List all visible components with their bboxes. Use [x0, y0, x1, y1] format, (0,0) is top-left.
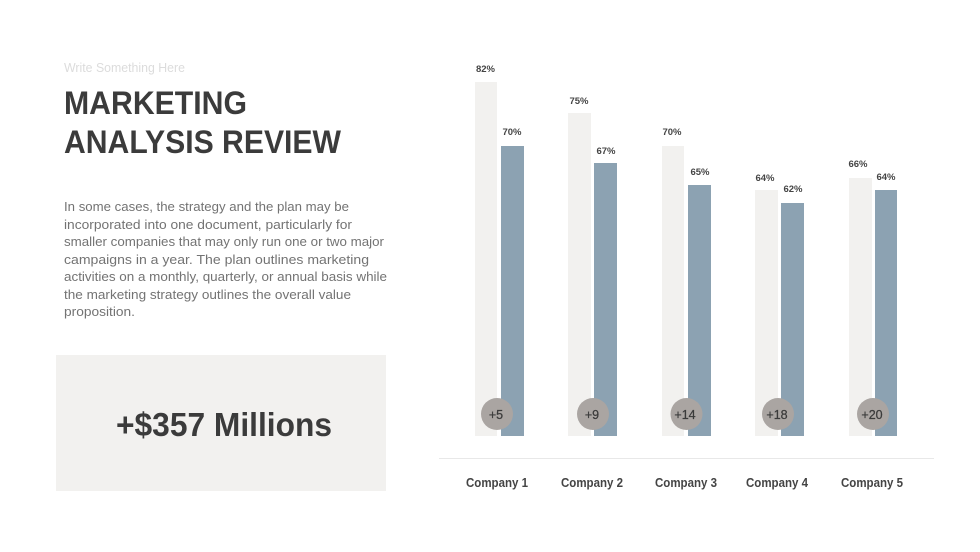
company labels: Company 3	[655, 476, 717, 490]
company 4 bars	[755, 173, 804, 436]
company 1 bars	[475, 64, 524, 436]
company 4 bars: 62%	[783, 184, 803, 195]
company 4 bars: 64%	[755, 173, 775, 184]
bar chart	[439, 64, 934, 490]
axis line	[439, 458, 934, 459]
company 2 bars: 75%	[569, 96, 589, 107]
body paragraph	[64, 199, 387, 319]
difference badges: +18	[766, 408, 788, 422]
callout value: +$357 Millions	[116, 406, 332, 443]
difference badges	[481, 398, 889, 430]
difference badges: +14	[674, 408, 696, 422]
body paragraph: incorporated into one document, particularly for	[64, 217, 353, 232]
company labels: Company 2	[561, 476, 623, 490]
company labels	[466, 476, 903, 490]
company labels: Company 4	[746, 476, 808, 490]
title: ANALYSIS REVIEW	[64, 124, 342, 160]
body paragraph: activities on a monthly, quarterly, or annual basis while	[64, 269, 387, 284]
body paragraph: proposition.	[64, 304, 135, 319]
company 3 bars	[662, 127, 711, 436]
company labels: Company 5	[841, 476, 903, 490]
title	[64, 85, 342, 160]
company labels: Company 1	[466, 476, 528, 490]
company 3 bars: 70%	[662, 127, 682, 138]
company 5 bars: 64%	[876, 172, 896, 183]
company 1 bars: 82%	[476, 64, 496, 75]
body paragraph: the marketing strategy outlines the overall value	[64, 287, 351, 302]
callout panel	[56, 355, 386, 491]
title: MARKETING	[64, 85, 247, 121]
body paragraph: campaigns in a year. The plan outlines marketing	[64, 252, 369, 267]
company 5 bars	[848, 159, 897, 436]
body paragraph: smaller companies that may only run one or two major	[64, 234, 385, 249]
company 3 bars: 65%	[690, 167, 710, 178]
eyebrow text: Write Something Here	[64, 61, 185, 75]
difference badges: +20	[861, 408, 883, 422]
body paragraph: In some cases, the strategy and the plan may be	[64, 199, 349, 214]
company 2 bars	[568, 96, 617, 436]
company 1 bars: 70%	[502, 127, 522, 138]
difference badges: +5	[489, 408, 503, 422]
company 5 bars: 66%	[848, 159, 868, 170]
difference badges: +9	[585, 408, 599, 422]
company 2 bars: 67%	[596, 146, 616, 157]
